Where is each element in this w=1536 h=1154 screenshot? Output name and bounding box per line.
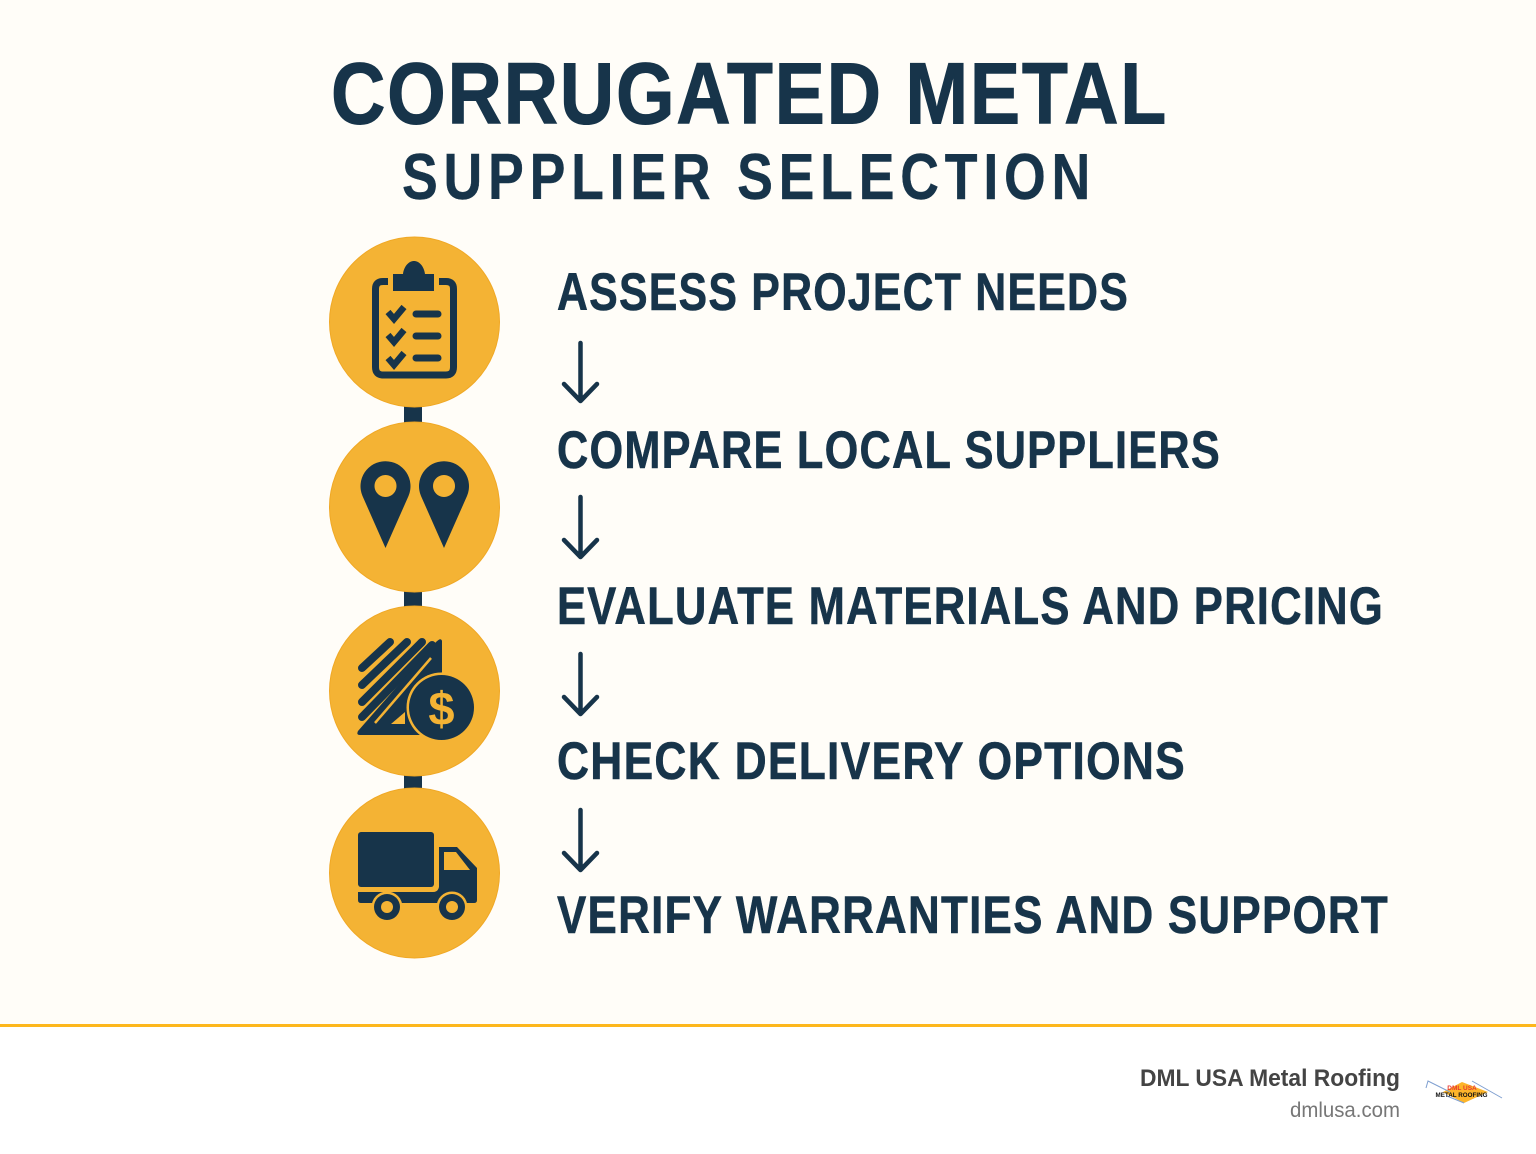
footer website: dmlusa.com <box>1290 1099 1400 1122</box>
footer logo: DML USA <box>1447 1085 1477 1092</box>
icon: metal sheet with price <box>330 606 500 776</box>
arrow 4 <box>564 810 597 870</box>
step 5 label: VERIFY WARRANTIES AND SUPPORT <box>557 886 1389 945</box>
icon: map pins <box>330 422 500 592</box>
icon: delivery truck <box>330 788 500 958</box>
arrow 2 <box>564 497 597 557</box>
step 4 label: CHECK DELIVERY OPTIONS <box>557 732 1186 791</box>
step 2 label: COMPARE LOCAL SUPPLIERS <box>557 421 1221 480</box>
step 3 label: EVALUATE MATERIALS AND PRICING <box>557 577 1384 636</box>
title <box>331 46 1168 213</box>
connectors between circles <box>404 403 422 792</box>
arrow 1 <box>564 343 597 401</box>
footer brand name: DML USA Metal Roofing <box>1140 1065 1400 1092</box>
arrow 3 <box>564 654 597 714</box>
icon: metal sheet with price: $ <box>428 682 455 735</box>
footer logo: METAL ROOFING <box>1436 1092 1488 1099</box>
step 1 label: ASSESS PROJECT NEEDS <box>557 263 1129 322</box>
title: SUPPLIER SELECTION <box>402 140 1096 213</box>
title: CORRUGATED METAL <box>331 46 1168 142</box>
footer logo <box>1426 1081 1502 1103</box>
icon: clipboard checklist <box>330 237 500 407</box>
